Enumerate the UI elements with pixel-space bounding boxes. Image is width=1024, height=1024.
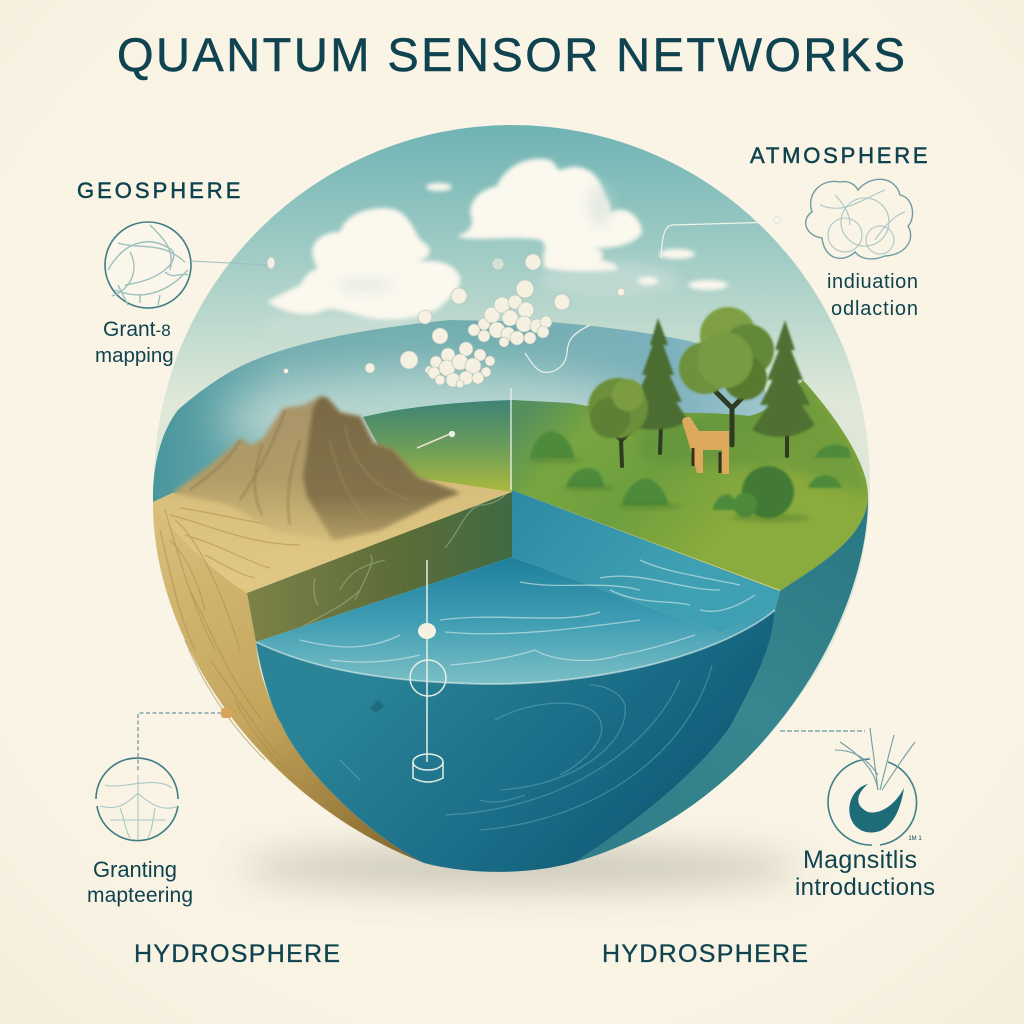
caption line 2: odlaction bbox=[831, 298, 918, 320]
title: QUANTUM SENSOR NETWORKS bbox=[117, 28, 905, 81]
icon: cloud sketch bbox=[806, 179, 913, 259]
far green hillside bbox=[363, 400, 540, 494]
water band haze bbox=[220, 370, 660, 470]
caption line 2: introductions bbox=[795, 874, 935, 901]
underwater swirls bbox=[340, 665, 712, 830]
water band behind horizon bbox=[153, 320, 775, 502]
cut wall: geosphere bbox=[247, 492, 512, 642]
water front hemisphere bbox=[256, 610, 775, 872]
caption line 2: mapteering bbox=[87, 884, 193, 907]
geosphere callout bbox=[77, 178, 275, 367]
yellow shore line bbox=[512, 491, 780, 591]
wall veins bbox=[280, 495, 505, 640]
clouds bbox=[260, 159, 728, 335]
leader line bbox=[661, 222, 775, 258]
icon: sensor marker bbox=[267, 257, 275, 269]
back meadow shading bbox=[640, 380, 868, 495]
water back wall bbox=[512, 490, 780, 633]
dashed leader bbox=[138, 713, 222, 770]
label: geosphere: GEOSPHERE bbox=[77, 178, 243, 203]
caption line 2: mapping bbox=[95, 344, 174, 367]
trees bbox=[527, 307, 850, 522]
sky dome bbox=[154, 125, 870, 841]
conifer right bbox=[752, 320, 815, 437]
sensor chain bbox=[410, 560, 446, 782]
green land quadrant bbox=[512, 380, 868, 591]
icon: terrain map circle bbox=[105, 222, 191, 308]
caption: indiuation bbox=[827, 271, 918, 293]
water surface bbox=[256, 557, 775, 684]
dark speck in water bbox=[370, 700, 384, 713]
right ocean shell bbox=[575, 495, 868, 862]
tiny mark: 1M 1 bbox=[908, 836, 922, 842]
molecular cluster nodes bbox=[284, 254, 625, 388]
ground shadow bbox=[240, 846, 800, 890]
label: hydrosphere right: HYDROSPHERE bbox=[602, 940, 809, 968]
mountain bbox=[172, 397, 460, 542]
sensor marker bbox=[221, 708, 232, 718]
sand shell bbox=[153, 502, 424, 863]
globe cutaway illustration bbox=[153, 125, 870, 872]
sand strata lines bbox=[160, 508, 340, 810]
lower-right callout bbox=[780, 728, 935, 901]
caption: Grant-8 bbox=[103, 318, 171, 341]
dashed leader bbox=[780, 730, 865, 732]
bush shadows bbox=[527, 457, 810, 522]
sand top surface bbox=[153, 478, 512, 593]
label: atmosphere: ATMOSPHERE bbox=[750, 143, 930, 168]
wooden chair-shaped animal bbox=[682, 417, 729, 474]
leader end bbox=[774, 216, 780, 224]
icon: magnetic swirl bbox=[828, 728, 917, 845]
conifer left bbox=[622, 318, 688, 430]
water ripples bbox=[256, 560, 775, 684]
lower-left callout bbox=[87, 708, 232, 907]
caption: Granting bbox=[93, 857, 177, 882]
leader line bbox=[191, 261, 268, 265]
sensor line in sky bbox=[417, 325, 590, 490]
icon: cutaway globe bbox=[96, 758, 178, 841]
label: hydrosphere left: HYDROSPHERE bbox=[134, 940, 341, 968]
caption: Magnsitlis bbox=[803, 846, 917, 874]
atmosphere callout bbox=[661, 143, 930, 320]
bushes bbox=[530, 431, 850, 518]
